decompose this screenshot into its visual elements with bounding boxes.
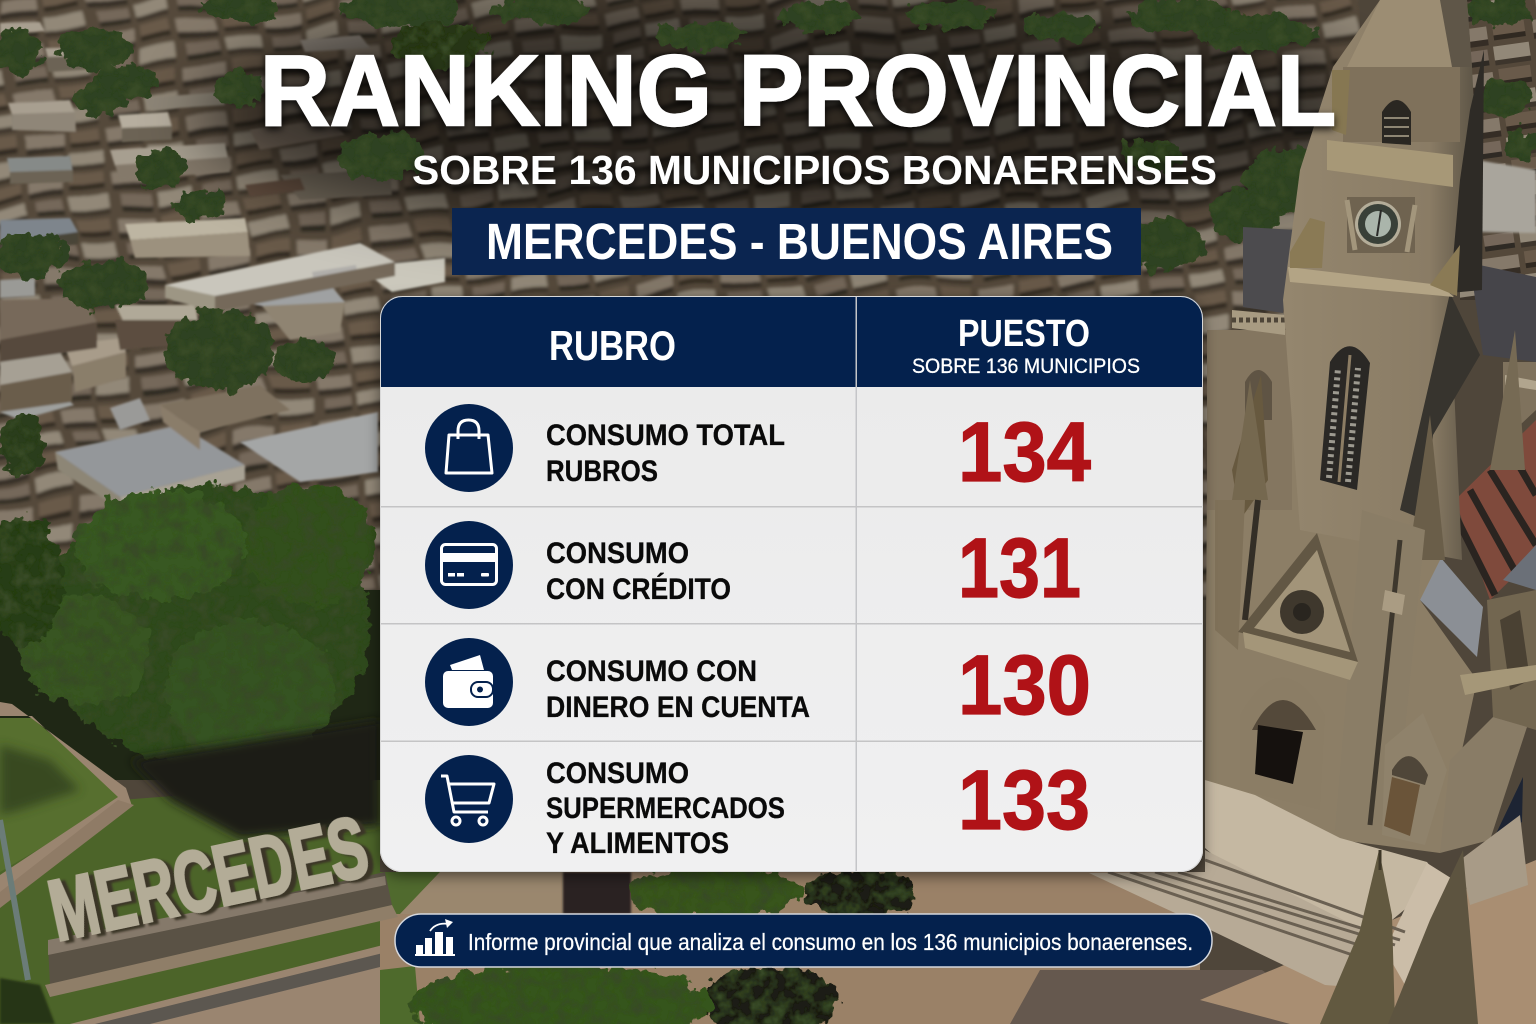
gable and rose window xyxy=(1238,533,1358,662)
tree canopy across the city xyxy=(0,0,1536,477)
row 1 label: RUBROS xyxy=(546,455,658,488)
header: puesto: PUESTO xyxy=(958,313,1090,355)
row 4 label: Y ALIMENTOS xyxy=(546,827,729,860)
main portal xyxy=(1240,678,1325,810)
header: puesto xyxy=(912,313,1140,378)
footer note pill xyxy=(395,914,1212,967)
red roof xyxy=(1455,420,1536,600)
cathedral xyxy=(1089,0,1536,1024)
roofs and side buildings xyxy=(1470,263,1536,362)
monument sign: MERCEDES xyxy=(41,799,376,960)
row 2 label: CON CRÉDITO xyxy=(546,572,731,606)
park lawn and paths xyxy=(0,702,430,1024)
icon: rising bar chart xyxy=(415,919,455,956)
row 3 label xyxy=(546,655,810,724)
panel: ranking table xyxy=(380,296,1203,872)
entrance landing xyxy=(1205,780,1440,930)
row 2 label xyxy=(546,537,731,606)
subtitle: SOBRE 136 MUNICIPIOS BONAERENSES xyxy=(412,147,1217,193)
row 2 label: CONSUMO xyxy=(546,537,689,570)
whites right of tower xyxy=(1477,160,1536,233)
icon: wallet xyxy=(425,638,513,726)
row 1 label: CONSUMO TOTAL xyxy=(546,419,785,452)
foreground spires xyxy=(1320,850,1395,1024)
row 1 rank: 134 xyxy=(958,405,1091,499)
row 4 label: SUPERMERCADOS xyxy=(546,792,785,825)
icon: shopping cart xyxy=(425,755,513,843)
slate roof xyxy=(1420,537,1483,657)
row 3 label: DINERO EN CUENTA xyxy=(546,691,810,724)
right turret xyxy=(1487,590,1536,730)
location banner: MERCEDES - BUENOS AIRES xyxy=(486,213,1113,270)
plaza and paving xyxy=(380,860,1536,1024)
city rooftops xyxy=(0,0,1536,600)
side door xyxy=(1382,713,1447,845)
row 1 label xyxy=(546,419,785,488)
title: RANKING PROVINCIAL xyxy=(260,35,1336,147)
tall window xyxy=(1320,346,1370,490)
darkened band behind title xyxy=(200,0,1400,235)
row 4 label: CONSUMO xyxy=(546,757,689,790)
belfry window xyxy=(1382,100,1411,145)
icon: shopping bag xyxy=(425,404,513,492)
buttress columns xyxy=(1215,500,1245,650)
row 4 label xyxy=(546,757,785,860)
header: rubro: RUBRO xyxy=(549,322,676,369)
main wall xyxy=(1205,330,1477,853)
footer text: Informe provincial que analiza el consumo en los 136 municipios bonaerenses. xyxy=(468,929,1193,955)
tower xyxy=(1283,0,1478,560)
header: puesto: SOBRE 136 MUNICIPIOS xyxy=(912,355,1140,378)
row 2 rank: 131 xyxy=(958,521,1081,615)
stairs xyxy=(1089,850,1393,990)
pinnacles xyxy=(1232,380,1268,500)
row 3 rank: 130 xyxy=(958,638,1091,732)
monument sign xyxy=(41,799,398,997)
row 3 label: CONSUMO CON xyxy=(546,655,757,688)
icon: credit card xyxy=(425,521,513,609)
row 4 rank: 133 xyxy=(958,753,1090,847)
big central tree xyxy=(0,485,380,780)
clock xyxy=(1347,197,1415,253)
